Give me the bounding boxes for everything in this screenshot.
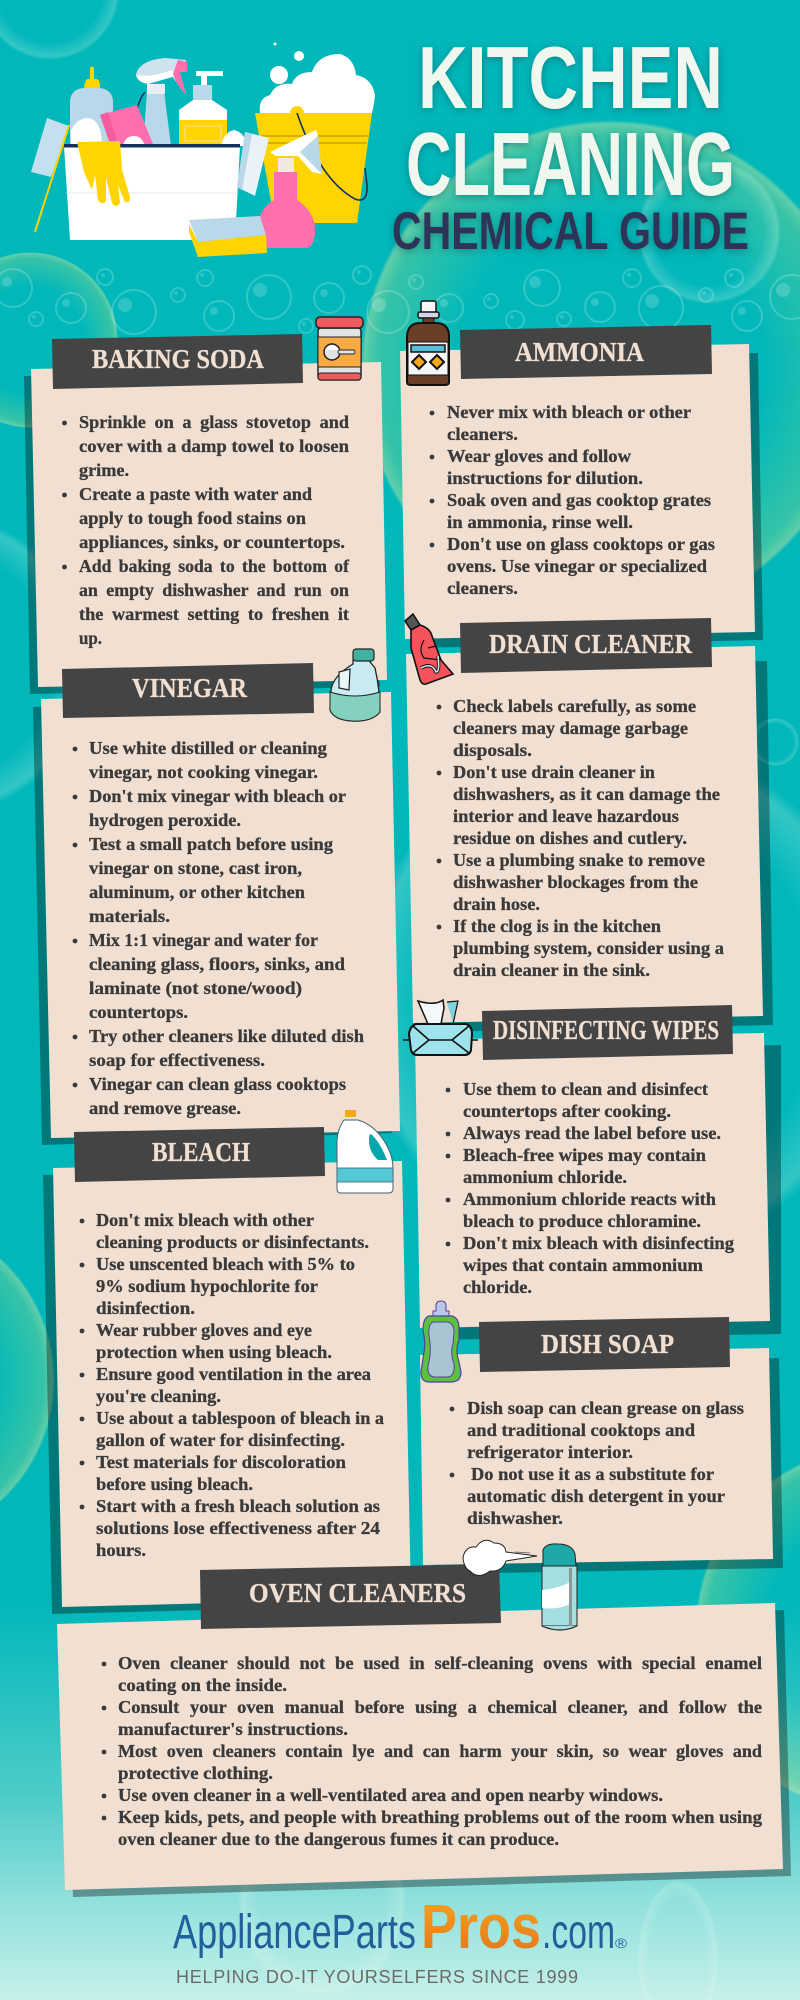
text: vinegar tips: vinegar, not cooking vinegar. bbox=[89, 762, 318, 782]
text: vinegar tips: Vinegar can clean glass cooktops bbox=[89, 1074, 346, 1094]
text: drain cleaner tips: Check labels carefully, as some bbox=[453, 696, 696, 716]
text: dish soap tips: automatic dish detergent in your bbox=[467, 1486, 725, 1506]
text: dish soap tips: Dish soap can clean grease on glass bbox=[467, 1398, 744, 1418]
heading: disinfecting wipes bbox=[482, 1005, 733, 1060]
text: vinegar tips: materials. bbox=[89, 906, 170, 926]
text: bleach tips: Test materials for discoloration bbox=[96, 1452, 346, 1472]
text: oven cleaner tips: protective clothing. bbox=[118, 1763, 273, 1783]
text: dish soap tips bbox=[450, 1398, 744, 1528]
text: drain cleaner tips: If the clog is in the kitchen bbox=[453, 916, 661, 936]
text: drain cleaner tips: dishwashers, as it can damage the bbox=[453, 784, 720, 804]
panel: dish soap bbox=[420, 1301, 783, 1574]
text: baking soda tips: grime. bbox=[79, 460, 129, 480]
text: drain cleaner tips: drain cleaner in the sink. bbox=[453, 960, 650, 980]
icon: dish soap bottle bbox=[421, 1301, 461, 1382]
text: vinegar tips: countertops. bbox=[89, 1002, 188, 1022]
icon: drain cleaner bottle bbox=[405, 614, 453, 684]
text: vinegar tips: laminate (not stone/wood) bbox=[89, 978, 302, 999]
text: bleach tips: hours. bbox=[96, 1540, 146, 1560]
illustration: cleaning supplies bbox=[31, 42, 375, 257]
text: baking soda tips: Add baking soda to the bottom of bbox=[79, 556, 350, 576]
panel: drain cleaner bbox=[405, 614, 773, 1032]
text: bleach tips bbox=[80, 1210, 384, 1560]
text: oven cleaner tips: Keep kids, pets, and people with breathing problems out of the room when using bbox=[118, 1807, 762, 1827]
text: disinfecting wipes tips: Always read the label before use. bbox=[463, 1123, 721, 1143]
logo: AppliancePartsPros.com: ApplianceParts bbox=[173, 1906, 416, 1959]
text: ammonia tips: in ammonia, rinse well. bbox=[447, 512, 633, 532]
text: vinegar tips bbox=[73, 738, 364, 1118]
text: drain cleaner tips: disposals. bbox=[453, 740, 532, 760]
text: drain cleaner tips: plumbing system, consider using a bbox=[453, 938, 724, 958]
text: disinfecting wipes tips: bleach to produce chloramine. bbox=[463, 1211, 701, 1231]
text: oven cleaner tips: Most oven cleaners contain lye and can harm your skin, so wear gloves and bbox=[118, 1741, 762, 1761]
text: drain cleaner tips: Use a plumbing snake to remove bbox=[453, 850, 705, 870]
text: bleach tips: Wear rubber gloves and eye bbox=[96, 1320, 312, 1340]
text: baking soda tips: Sprinkle on a glass stovetop and bbox=[79, 412, 349, 432]
text: drain cleaner tips: interior and leave hazardous bbox=[453, 806, 679, 826]
text: vinegar tips: and remove grease. bbox=[89, 1098, 241, 1118]
icon: wipes box bbox=[403, 1000, 478, 1055]
title line: Kitchen: KITCHEN bbox=[418, 28, 723, 127]
text: dish soap tips: Do not use it as a substitute for bbox=[471, 1464, 714, 1484]
text: disinfecting wipes tips: chloride. bbox=[463, 1277, 532, 1297]
heading: disinfecting wipes: DISINFECTING WIPES bbox=[493, 1015, 719, 1045]
text: vinegar tips: Try other cleaners like diluted dish bbox=[89, 1026, 364, 1046]
text: disinfecting wipes tips: countertops after cooking. bbox=[463, 1101, 671, 1121]
heading: bleach bbox=[74, 1127, 325, 1182]
text: ammonia tips: Soak oven and gas cooktop grates bbox=[447, 490, 711, 510]
text: vinegar tips: soap for effectiveness. bbox=[89, 1050, 265, 1070]
text: vinegar tips: Don't mix vinegar with bleach or bbox=[89, 786, 346, 806]
text: ammonia tips: Never mix with bleach or other bbox=[447, 402, 691, 422]
icon: ammonia bottle bbox=[407, 301, 449, 385]
panel: baking soda bbox=[24, 317, 387, 694]
text: vinegar tips: Test a small patch before using bbox=[89, 834, 333, 854]
text: vinegar tips: cleaning glass, floors, sinks, and bbox=[89, 954, 345, 974]
text: drain cleaner tips: cleaners may damage garbage bbox=[453, 718, 688, 738]
text: bleach tips: Ensure good ventilation in the area bbox=[96, 1364, 371, 1384]
text: baking soda tips: the warmest setting to freshen it bbox=[79, 604, 349, 624]
text: drain cleaner tips bbox=[437, 696, 724, 980]
tagline: HELPING DO-IT YOURSELFERS SINCE 1999 bbox=[176, 1967, 578, 1987]
text: bleach tips: gallon of water for disinfecting. bbox=[96, 1430, 345, 1450]
text: baking soda tips: an empty dishwasher and run on bbox=[79, 580, 349, 600]
text: disinfecting wipes tips: Ammonium chloride reacts with bbox=[463, 1189, 716, 1209]
panel: ammonia bbox=[400, 301, 763, 648]
heading: drain cleaner bbox=[460, 618, 712, 673]
text: bleach tips: Don't mix bleach with other bbox=[96, 1210, 314, 1230]
text: oven cleaner tips: manufacturer's instructions. bbox=[118, 1719, 348, 1739]
text: vinegar tips: Mix 1:1 vinegar and water for bbox=[89, 930, 318, 950]
text: oven cleaner tips: Use oven cleaner in a well-ventilated area and open nearby windows. bbox=[118, 1785, 663, 1805]
text: baking soda tips bbox=[62, 412, 350, 648]
logo: AppliancePartsPros.com: .com bbox=[542, 1906, 615, 1959]
text: ammonia tips: ovens. Use vinegar or specialized bbox=[447, 556, 707, 576]
icon: baking soda box bbox=[316, 317, 363, 380]
text: bleach tips: solutions lose effectiveness after 24 bbox=[96, 1518, 380, 1538]
text: ammonia tips: Don't use on glass cooktops or gas bbox=[447, 534, 715, 554]
text: oven cleaner tips: coating on the inside. bbox=[118, 1675, 287, 1695]
text: vinegar tips: vinegar on stone, cast iron, bbox=[89, 858, 302, 878]
text: disinfecting wipes tips: wipes that contain ammonium bbox=[463, 1255, 703, 1275]
heading: baking soda bbox=[52, 334, 303, 389]
text: disinfecting wipes tips: Bleach-free wipes may contain bbox=[463, 1145, 706, 1165]
text: ammonia tips bbox=[430, 402, 715, 598]
heading: baking soda: BAKING SODA bbox=[92, 344, 264, 374]
text: baking soda tips: appliances, sinks, or countertops. bbox=[79, 532, 345, 552]
text: drain cleaner tips: dishwasher blockages from the bbox=[453, 872, 698, 892]
logo: AppliancePartsPros.com: Pros bbox=[421, 1893, 541, 1962]
text: bleach tips: protection when using bleach. bbox=[96, 1342, 332, 1362]
icon: bleach jug bbox=[337, 1110, 393, 1193]
text: oven cleaner tips: Oven cleaner should not be used in self-cleaning ovens with special enamel bbox=[118, 1653, 762, 1673]
text: bleach tips: before using bleach. bbox=[96, 1474, 253, 1494]
text: ammonia tips: Wear gloves and follow bbox=[447, 446, 631, 466]
title bbox=[392, 28, 749, 261]
text: dish soap tips: refrigerator interior. bbox=[467, 1442, 633, 1462]
text: baking soda tips: Create a paste with water and bbox=[79, 484, 312, 504]
heading: ammonia bbox=[460, 325, 712, 379]
panel: vinegar bbox=[33, 649, 400, 1145]
text: vinegar tips: Use white distilled or cleaning bbox=[89, 738, 327, 758]
text: ammonia tips: instructions for dilution. bbox=[447, 468, 643, 488]
text: bleach tips: Use unscented bleach with 5% to bbox=[96, 1254, 355, 1274]
panel: disinfecting wipes bbox=[403, 1000, 781, 1340]
heading: drain cleaner: DRAIN CLEANER bbox=[489, 629, 692, 659]
logo: AppliancePartsPros.com bbox=[173, 1893, 628, 1962]
heading: oven cleaners bbox=[200, 1564, 501, 1629]
text: drain cleaner tips: residue on dishes and cutlery. bbox=[453, 828, 687, 848]
text: drain cleaner tips: Don't use drain cleaner in bbox=[453, 762, 655, 782]
icon: vinegar jug bbox=[330, 649, 380, 721]
panel: bleach bbox=[43, 1110, 411, 1614]
text: drain cleaner tips: drain hose. bbox=[453, 894, 540, 914]
text: bleach tips: you're cleaning. bbox=[96, 1386, 221, 1406]
text: bleach tips: Use about a tablespoon of bleach in a bbox=[96, 1408, 384, 1428]
text: vinegar tips: hydrogen peroxide. bbox=[89, 810, 241, 830]
text: oven cleaner tips: oven cleaner due to the dangerous fumes it can produce. bbox=[118, 1829, 559, 1849]
text: disinfecting wipes tips: Don't mix bleach with disinfecting bbox=[463, 1233, 734, 1253]
text: dish soap tips: dishwasher. bbox=[467, 1508, 563, 1528]
text: ammonia tips: cleaners. bbox=[447, 578, 518, 598]
icon: oven cleaner spray can bbox=[463, 1540, 577, 1630]
logo: AppliancePartsPros.com: ® bbox=[615, 1935, 628, 1951]
heading: dish soap: DISH SOAP bbox=[541, 1329, 674, 1359]
text: bleach tips: Start with a fresh bleach solution as bbox=[96, 1496, 380, 1516]
text: disinfecting wipes tips: Use them to clean and disinfect bbox=[463, 1079, 708, 1099]
text: baking soda tips: apply to tough food stains on bbox=[79, 508, 306, 528]
panel: oven cleaners bbox=[57, 1540, 791, 1897]
text: oven cleaner tips: Consult your oven manual before using a chemical cleaner, and follow the bbox=[118, 1697, 762, 1717]
heading: dish soap bbox=[479, 1317, 730, 1372]
text: oven cleaner tips bbox=[102, 1653, 762, 1849]
text: bleach tips: cleaning products or disinfectants. bbox=[96, 1232, 369, 1252]
text: baking soda tips: cover with a damp towel to loosen bbox=[79, 436, 349, 456]
text: baking soda tips: up. bbox=[79, 628, 102, 648]
heading: oven cleaners: OVEN CLEANERS bbox=[249, 1578, 466, 1608]
text: ammonia tips: cleaners. bbox=[447, 424, 518, 444]
text: dish soap tips: and traditional cooktops and bbox=[467, 1420, 695, 1440]
text: bleach tips: disinfection. bbox=[96, 1298, 195, 1318]
heading: vinegar bbox=[62, 663, 314, 718]
text: disinfecting wipes tips: ammonium chloride. bbox=[463, 1167, 627, 1187]
heading: ammonia: AMMONIA bbox=[515, 337, 644, 367]
heading: bleach: BLEACH bbox=[152, 1137, 250, 1167]
text: bleach tips: 9% sodium hypochlorite for bbox=[96, 1276, 318, 1296]
text: vinegar tips: aluminum, or other kitchen bbox=[89, 882, 305, 902]
text: disinfecting wipes tips bbox=[446, 1079, 734, 1297]
heading: vinegar: VINEGAR bbox=[132, 673, 247, 703]
